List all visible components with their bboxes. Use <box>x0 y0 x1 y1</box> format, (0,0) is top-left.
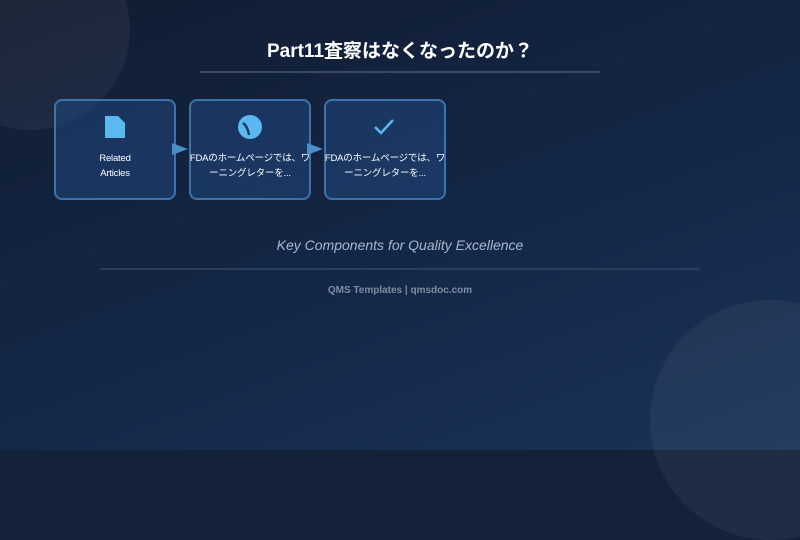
icon: check <box>374 119 394 135</box>
card 3 <box>324 99 446 200</box>
arrow 2 <box>307 143 323 155</box>
icon: globe <box>238 115 262 139</box>
card text: ーニングレターを... <box>344 168 426 179</box>
icon: document <box>105 116 125 138</box>
card 1: related articles <box>54 99 176 200</box>
card 2 <box>189 99 311 200</box>
card text: ーニングレターを... <box>209 168 291 179</box>
arrow 1 <box>172 143 188 155</box>
card text <box>190 153 310 179</box>
title: Part11査察はなくなったのか？ <box>267 41 533 62</box>
card text: FDAのホームページでは、ワ <box>325 153 445 164</box>
footer: QMS Templates | qmsdoc.com <box>328 285 472 296</box>
card text <box>325 153 445 179</box>
card text: FDAのホームページでは、ワ <box>190 153 310 164</box>
card text: Related <box>99 153 131 164</box>
subtitle: Key Components for Quality Excellence <box>277 237 523 253</box>
card text <box>99 153 131 179</box>
card text: Articles <box>100 168 130 179</box>
